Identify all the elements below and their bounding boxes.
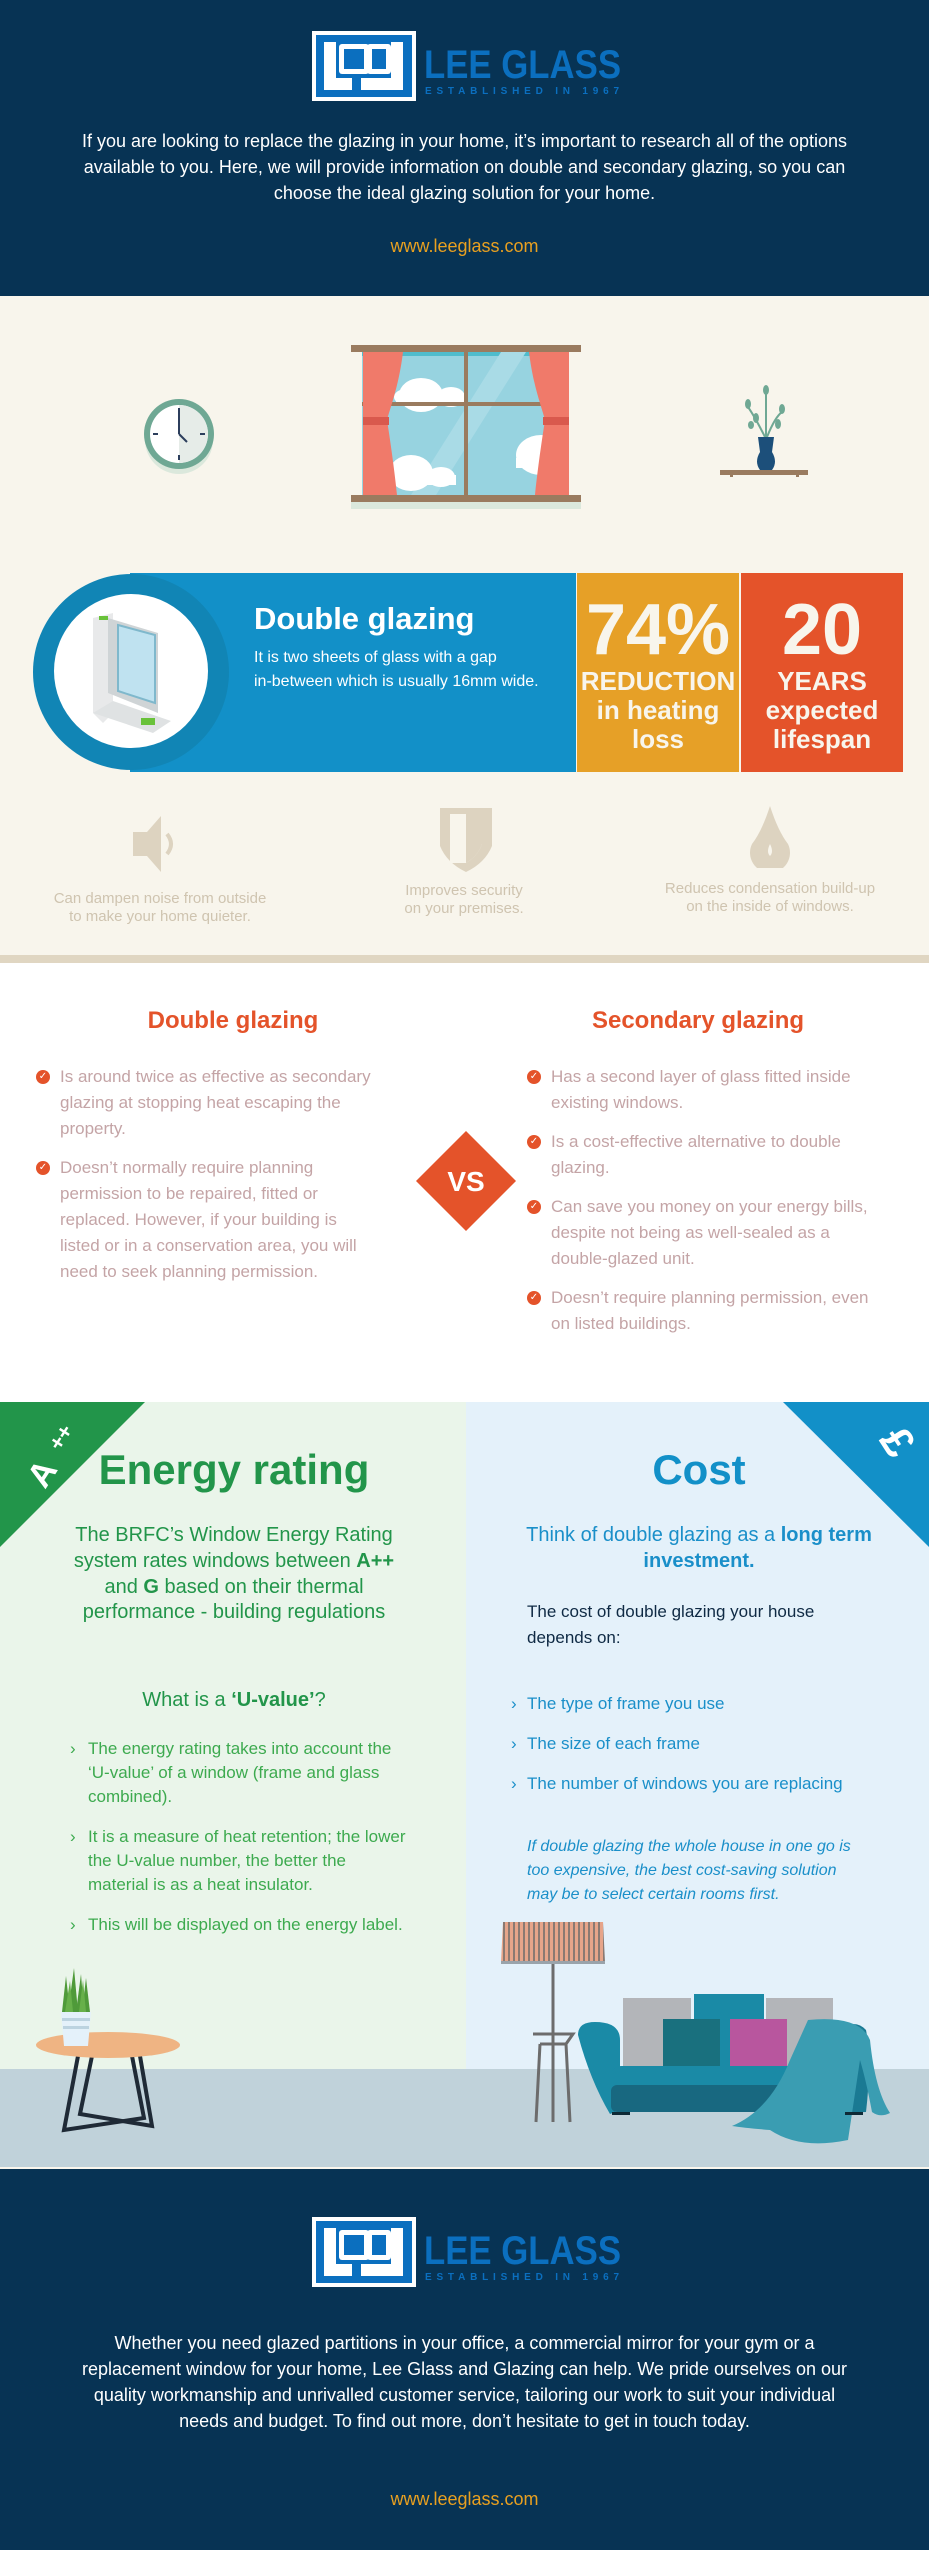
stat: 20 years: lifespan [773, 724, 871, 754]
list: secondary glazing: ✓ [530, 1071, 538, 1082]
subheading: What is a ‘U-value’? [142, 1689, 326, 1711]
icon: window frame circle [33, 574, 229, 770]
list: double glazing: listed or in a conservation area, you will [60, 1236, 357, 1255]
closing text: replacement window for your home, Lee Glass and Glazing can help. We pride ourselves on our [82, 2359, 847, 2379]
stat: 20 years: expected [766, 695, 878, 725]
list: double glazing: ✓ [39, 1162, 47, 1173]
list: double glazing: ✓ [39, 1071, 47, 1082]
description: It is two sheets of glass with a gap [254, 649, 497, 666]
list: secondary glazing: ✓ [530, 1201, 538, 1212]
list: u-value: It is a measure of heat retention; the lower [88, 1827, 406, 1846]
list: secondary glazing: Is a cost-effective alternative to double [551, 1132, 841, 1151]
closing text: needs and budget. To find out more, don’t hesitate to get in touch today. [179, 2411, 750, 2431]
subheading [526, 1524, 872, 1572]
icon: clock [144, 399, 214, 474]
benefit: noise: to make your home quieter. [69, 908, 251, 925]
intro text [82, 131, 847, 203]
list: double glazing: need to seek planning permission. [60, 1262, 318, 1281]
list: secondary glazing: double-glazed unit. [551, 1249, 695, 1268]
list: u-value: ‘U-value’ of a window (frame and glass [88, 1763, 379, 1782]
divider band [0, 955, 929, 963]
list: double glazing: Is around twice as effective as secondary [60, 1067, 371, 1086]
list: u-value: combined). [88, 1787, 172, 1806]
list: cost factors: The size of each frame [527, 1734, 700, 1753]
list: u-value: › [70, 1827, 76, 1846]
list: secondary glazing: Can save you money on your energy bills, [551, 1197, 868, 1216]
logo [312, 31, 621, 101]
description: and G based on their thermal [104, 1576, 364, 1598]
url: www.leeglass.com [390, 2489, 539, 2509]
stat: 74%: in heating [597, 695, 719, 725]
stat: 74%: 74% [586, 590, 730, 670]
text: depends on [527, 1602, 814, 1647]
url: www.leeglass.com [390, 236, 539, 256]
benefit: security [404, 808, 524, 917]
closing text: quality workmanship and unrivalled customer service, tailoring our work to suit your individual [94, 2385, 835, 2405]
text: depends on: depends on: [527, 1628, 621, 1647]
list: double glazing: permission to be repaired, fitted or [60, 1184, 318, 1203]
list: u-value: the U-value number, the better the [88, 1851, 346, 1870]
icon: window with curtains [351, 345, 581, 509]
list: secondary glazing: despite not being as well-sealed as a [551, 1223, 830, 1242]
icon: VS diamond: VS [447, 1166, 485, 1197]
subheading: Think of double glazing as a long term [526, 1524, 872, 1546]
description: in-between which is usually 16mm wide. [254, 673, 539, 690]
panel: cost [466, 1402, 929, 2069]
list: secondary glazing [527, 1067, 869, 1333]
intro text: available to you. Here, we will provide information on double and secondary glazing, so you can [84, 157, 845, 177]
logo: ESTABLISHED IN 1967 [425, 2272, 619, 2283]
benefit: condensation: on the inside of windows. [686, 898, 854, 915]
icon: pound triangle [783, 1402, 929, 1547]
intro text: If you are looking to replace the glazing in your home, it’s important to research all of the options [82, 131, 847, 151]
intro text: choose the ideal glazing solution for your home. [274, 183, 655, 203]
stat: 20 years: 20 [782, 590, 862, 670]
icon: VS diamond [416, 1131, 516, 1231]
benefit: condensation [665, 806, 875, 915]
icon: water drop [750, 806, 790, 868]
heading: Energy rating [99, 1446, 369, 1493]
panel: energy rating [0, 1402, 466, 2069]
logo [312, 2217, 621, 2287]
icon: A++ triangle [0, 1402, 145, 1547]
icon: vase on shelf [720, 385, 808, 477]
list: u-value: › [70, 1739, 76, 1758]
note: too expensive, the best cost-saving solution [527, 1862, 837, 1879]
floor [0, 2069, 929, 2167]
list: u-value: › [70, 1915, 76, 1934]
list: secondary glazing: Doesn’t require planning permission, even [551, 1288, 869, 1307]
header panel [0, 0, 929, 296]
heading: Cost [652, 1446, 746, 1493]
icon: A++ triangle: ++ [43, 1420, 78, 1455]
benefit: noise [54, 816, 266, 925]
stat: 74%: loss [632, 724, 684, 754]
panel: double glazing banner [33, 573, 903, 772]
benefit: noise: Can dampen noise from outside [54, 890, 266, 907]
stat: 20 years [741, 573, 903, 772]
description: performance - building regulations [83, 1601, 385, 1623]
list: cost factors: The type of frame you use [527, 1694, 724, 1713]
description [74, 1524, 394, 1623]
list: u-value: material is as a heat insulator. [88, 1875, 313, 1894]
list: secondary glazing: ✓ [530, 1292, 538, 1303]
icon: shield [440, 808, 492, 872]
stat: 20 years: YEARS [777, 666, 867, 696]
closing text [82, 2333, 847, 2431]
description: The BRFC’s Window Energy Rating [75, 1524, 393, 1546]
subheading: investment. [643, 1550, 755, 1572]
list: u-value [70, 1739, 406, 1934]
list: secondary glazing: Has a second layer of glass fitted inside [551, 1067, 851, 1086]
list: u-value: The energy rating takes into account the [88, 1739, 391, 1758]
note [527, 1838, 851, 1903]
icon: pound triangle: £ [870, 1418, 925, 1466]
list: double glazing: Doesn’t normally require planning [60, 1158, 313, 1177]
icon: table with plant [36, 1968, 180, 2132]
list: double glazing: replaced. However, if your building is [60, 1210, 337, 1229]
list: secondary glazing: ✓ [530, 1136, 538, 1147]
heading: secondary glazing: Secondary glazing [592, 1007, 804, 1034]
panel: comparison [0, 963, 929, 1402]
footer panel [0, 2169, 929, 2550]
list: cost factors: › [511, 1774, 517, 1793]
benefit: security: on your premises. [404, 900, 524, 917]
heading: Double glazing [254, 601, 474, 636]
icon: A++ triangle: A [20, 1453, 65, 1494]
icon: floor lamp [501, 1922, 605, 2122]
logo: ESTABLISHED IN 1967 [425, 86, 619, 97]
list: double glazing: glazing at stopping heat escaping the [60, 1093, 341, 1112]
note: If double glazing the whole house in one go is [527, 1838, 851, 1855]
stat: 74% [577, 573, 739, 772]
description [254, 649, 539, 690]
list: double glazing: property. [60, 1119, 126, 1138]
list: u-value: This will be displayed on the energy label. [88, 1915, 403, 1934]
list: cost factors: › [511, 1734, 517, 1753]
heading: double glazing: Double glazing [148, 1007, 318, 1034]
list: secondary glazing: on listed buildings. [551, 1314, 691, 1333]
list: cost factors: The number of windows you are replacing [527, 1774, 843, 1793]
stat: 74%: REDUCTION [581, 666, 735, 696]
benefit: security: Improves security [405, 882, 523, 899]
closing text: Whether you need glazed partitions in your office, a commercial mirror for your gym or a [115, 2333, 814, 2353]
note: may be to select certain rooms first. [527, 1886, 780, 1903]
list: secondary glazing: existing windows. [551, 1093, 683, 1112]
icon: speaker [133, 816, 173, 872]
list: secondary glazing: glazing. [551, 1158, 610, 1177]
icon: sofa [578, 1994, 890, 2144]
list: double glazing [36, 1067, 371, 1281]
text: depends on: The cost of double glazing your house [527, 1602, 814, 1621]
list: cost factors [511, 1694, 843, 1793]
benefit: condensation: Reduces condensation build-up [665, 880, 875, 897]
list: cost factors: › [511, 1694, 517, 1713]
description: system rates windows between A++ [74, 1550, 394, 1572]
